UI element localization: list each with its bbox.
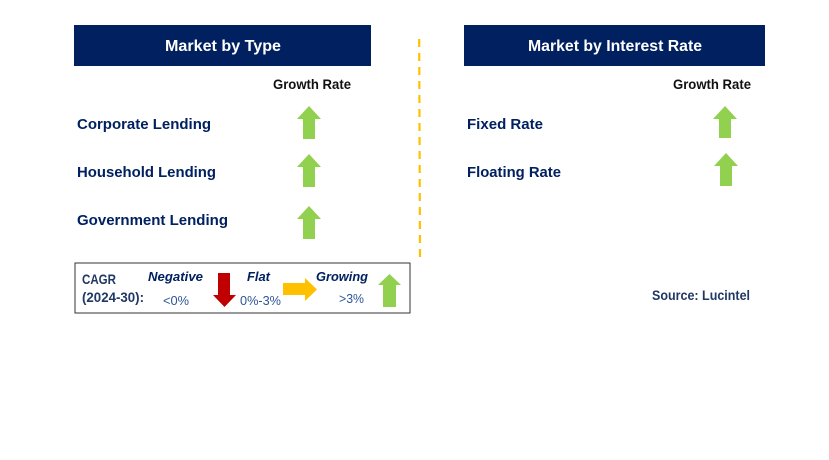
- source note: Source: Lucintel: [652, 288, 750, 303]
- row: corporate lending: [77, 106, 321, 139]
- legend: flat: [240, 269, 317, 308]
- legend: negative: <0%: [163, 293, 189, 308]
- panel: market by interest rate: [464, 25, 765, 186]
- row: floating rate: Floating Rate: [467, 165, 561, 181]
- row: fixed rate: Fixed Rate: [467, 117, 543, 133]
- heading: market by interest rate: Market by Interest Rate: [528, 38, 702, 55]
- row: floating rate: [467, 153, 738, 186]
- row: government lending: Government Lending: [77, 213, 228, 229]
- column label: growth rate: Growth Rate: [273, 76, 351, 92]
- legend title: (2024-30):: [82, 289, 144, 305]
- legend title: CAGR: [82, 271, 116, 287]
- row: household lending: [77, 154, 321, 187]
- row: fixed rate: [467, 106, 737, 138]
- legend: CAGR: [75, 263, 410, 313]
- legend: growing: Growing: [316, 269, 368, 284]
- legend: flat: 0%-3%: [240, 293, 281, 308]
- row: corporate lending: Corporate Lending: [77, 117, 211, 133]
- dashed divider: [418, 39, 421, 257]
- row: government lending: [77, 206, 321, 239]
- heading: market by type: Market by Type: [165, 38, 281, 55]
- legend: negative: [148, 269, 236, 308]
- legend: growing: [316, 269, 401, 307]
- legend: flat: Flat: [247, 269, 271, 284]
- heading: market by interest rate: [464, 25, 765, 66]
- panel: market by type: [74, 25, 371, 239]
- legend title: [82, 271, 144, 305]
- row: household lending: Household Lending: [77, 165, 216, 181]
- column label: growth rate: Growth Rate: [673, 76, 751, 92]
- legend: negative: Negative: [148, 269, 203, 284]
- legend: growing: >3%: [339, 291, 364, 306]
- heading: market by type: [74, 25, 371, 66]
